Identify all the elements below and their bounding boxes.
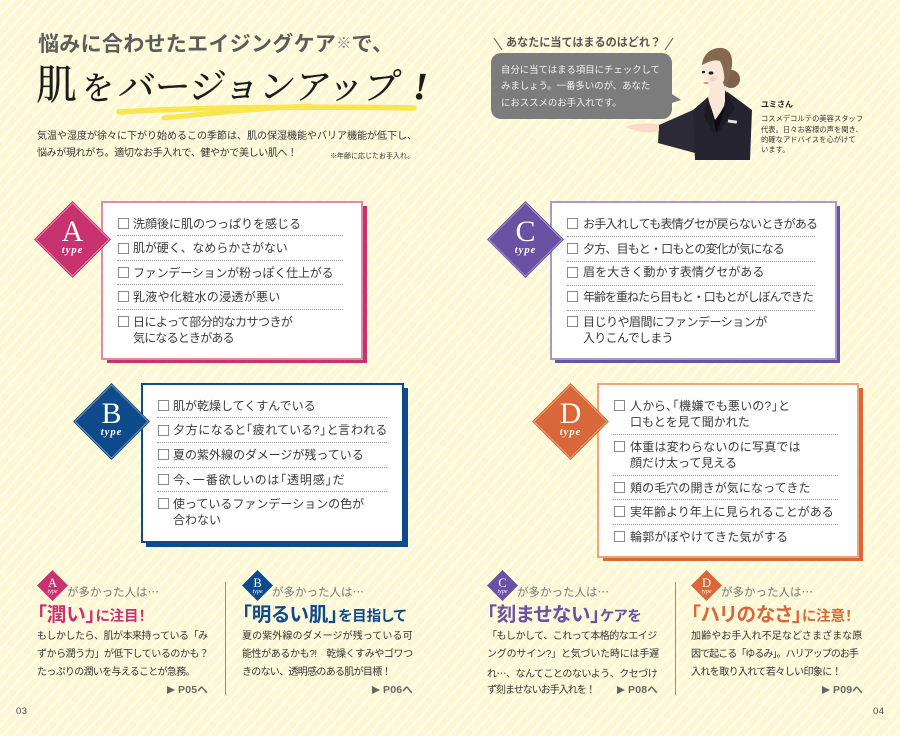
page number right: 04 — [873, 706, 885, 717]
illustration: staff woman — [626, 48, 752, 160]
badge: D type: type — [560, 427, 581, 438]
result: type A: が多かった人は… — [67, 584, 159, 600]
badge: A type — [34, 201, 111, 278]
subtitle heading: 悩みに合わせたエイジングケア※で、 — [38, 33, 393, 56]
panel: type A checklist: 気になるときがある — [133, 331, 234, 345]
staff profile: います。 — [761, 145, 789, 154]
panel: type B checklist — [73, 383, 408, 547]
result: type B: P06へ — [383, 684, 413, 696]
result: type C: P08へ — [628, 684, 658, 696]
panel: type B checklist: 肌が乾燥してくすんでいる — [173, 399, 316, 413]
small badge A: type — [48, 589, 58, 595]
staff profile: コスメデコルテの美容スタッフ — [761, 114, 863, 123]
panel: type B checklist: 夕方になると「疲れている?」と言われる — [173, 423, 387, 437]
result: type D: が多かった人は… — [721, 584, 813, 600]
staff profile: 的確なアドバイスを心がけて — [761, 135, 856, 144]
main title — [36, 62, 428, 108]
small badge C: C — [498, 576, 507, 590]
panel: type A checklist: 洗顔後に肌のつっぱりを感じる — [133, 217, 301, 231]
result: type B: が多かった人は… — [272, 584, 364, 600]
result: type D: P09へ — [833, 684, 863, 696]
badge: B type: type — [101, 427, 122, 438]
main title: 肌を — [36, 62, 114, 108]
badge: C type: type — [515, 245, 536, 256]
result: type A: P05へ — [178, 684, 208, 696]
panel: type B checklist: 合わない — [173, 513, 221, 527]
result: type D: 「ハリのなさ」に注意！ — [691, 604, 852, 626]
staff profile: ユミさん — [761, 100, 793, 109]
badge: D type: D — [560, 397, 581, 430]
result: type A: ずから潤う力」が低下しているのかも？ — [37, 649, 209, 660]
panel: type D checklist: 人から、「機嫌でも悪いの?」と — [630, 399, 790, 413]
result: type A: もしかしたら、肌が本来持っている「み — [37, 631, 208, 642]
panel: type A checklist: ファンデーションが粉っぽく仕上がる — [133, 266, 333, 280]
panel: type B checklist: 使っているファンデーションの色が — [173, 497, 364, 511]
small badge D: type — [702, 589, 712, 595]
staff profile — [761, 100, 863, 154]
panel: type A checklist: 乳液や化粧水の浸透が悪い — [133, 290, 281, 304]
intro text: ※年齢に応じたお手入れ。 — [330, 153, 414, 160]
small badge A: A — [48, 576, 57, 590]
result: type D: 因で起こる「ゆるみ」。ハリアップのお手 — [691, 649, 858, 660]
result: type C: 「刻ませない」ケアを — [487, 604, 641, 626]
yellow brush underline — [116, 104, 417, 120]
speech bubble — [491, 53, 681, 119]
main title: バージョンアップ — [116, 67, 402, 107]
intro text — [37, 130, 417, 160]
result: type C: ず刻ませないお手入れを！ — [487, 685, 595, 696]
badge: C type: C — [515, 215, 536, 248]
speech bubble: 自分に当てはまる項目にチェックして — [501, 64, 660, 74]
panel: type D checklist: 実年齢より年上に見られることがある — [630, 505, 834, 519]
panel: type B checklist: 夏の紫外線のダメージが残っている — [173, 448, 364, 462]
panel: type C checklist: 年齢を重ねたら目もと・口もとがしぼんできた — [583, 290, 813, 304]
result: type B — [242, 570, 413, 696]
result: type A: たっぷりの潤いを与えることが急務。 — [37, 667, 195, 678]
panel: type A checklist: 日によって部分的なカサつきが — [133, 315, 292, 329]
main title: ! — [413, 66, 428, 108]
small badge C — [487, 570, 518, 601]
panel: type D checklist: 体重は変わらないのに写真では — [630, 440, 801, 454]
badge: B type — [73, 383, 150, 460]
panel: type D checklist — [532, 383, 863, 561]
panel: type C checklist: 入りこんでしまう — [583, 331, 673, 345]
panel: type D checklist: 口もとを見て聞かれた — [630, 415, 750, 429]
panel: type D checklist: 頬の毛穴の開きが気になってきた — [630, 480, 811, 494]
result: type D: 入れを取り入れて若々しい印象に！ — [691, 667, 841, 678]
page number left: 03 — [16, 706, 28, 717]
small badge C: type — [498, 589, 508, 595]
panel: type D checklist: 顔だけ太って見える — [630, 456, 737, 470]
result: type C: 「もしかして、これって本格的なエイジ — [487, 631, 657, 642]
result: type C: が多かった人は… — [517, 584, 609, 600]
small badge B: B — [253, 576, 262, 590]
divider A/B — [225, 582, 226, 695]
result: type A — [37, 570, 209, 696]
speech bubble: におススメのお手入れです。 — [501, 96, 622, 108]
small badge B — [242, 570, 273, 601]
panel: type D checklist: 輪郭がぼやけてきた気がする — [630, 530, 788, 544]
result: type B: 「明るい肌」を目指して — [242, 604, 406, 626]
small badge A — [37, 570, 68, 601]
panel: type C checklist: 夕方、目もと・口もとの変化が気になる — [583, 242, 784, 256]
speech heading: あなたに当てはまるのはどれ？ — [506, 37, 661, 49]
divider C/D — [675, 582, 676, 695]
small badge D: D — [702, 576, 711, 590]
result: type B: 能性があるかも?! 乾燥くすみやゴワつ — [242, 649, 413, 660]
result: type D: 加齢やお手入れ不足などさまざまな原 — [691, 631, 862, 642]
panel: type B checklist: 今、一番欲しいのは「透明感」だ — [173, 472, 346, 486]
result: type C: ングのサイン?」と気づいた時には手遅 — [487, 649, 659, 660]
small badge B: type — [252, 589, 263, 595]
small badge D — [691, 570, 722, 601]
result: type C: れ…、なんてことのないよう、クセづけ — [487, 665, 657, 680]
panel: type C checklist — [487, 201, 840, 363]
badge: C type — [487, 201, 564, 278]
intro text: 気温や湿度が徐々に下がり始めるこの季節は、肌の保湿機能やバリア機能が低下し、 — [37, 131, 417, 142]
panel: type C checklist: 眉を大きく動かす表情グセがある — [583, 265, 765, 279]
badge: A type: A — [62, 215, 84, 248]
speech bubble: みましょう。一番多いのが、あなた — [501, 80, 650, 91]
result: type A: 「潤い」に注目！ — [37, 604, 146, 626]
badge: B type: B — [101, 397, 122, 430]
badge: D type — [532, 383, 609, 460]
panel: type C checklist: 目じりや眉間にファンデーションが — [583, 315, 767, 329]
result: type D — [691, 570, 863, 696]
result: type C — [487, 570, 659, 696]
panel: type A checklist — [34, 201, 367, 363]
badge: A type: type — [62, 245, 83, 256]
result: type B: 夏の紫外線のダメージが残っている可 — [242, 631, 413, 642]
result: type B: きのない、透明感のある肌が目標！ — [242, 667, 391, 678]
panel: type A checklist: 肌が硬く、なめらかさがない — [133, 241, 288, 255]
panel: type C checklist: お手入れしても表情グセが戻らないときがある — [583, 217, 817, 231]
staff profile: 代表。日々お客様の声を聞き、 — [761, 125, 863, 134]
intro text: 悩みが現れがち。適切なお手入れで、健やかで美しい肌へ！ — [37, 148, 297, 159]
